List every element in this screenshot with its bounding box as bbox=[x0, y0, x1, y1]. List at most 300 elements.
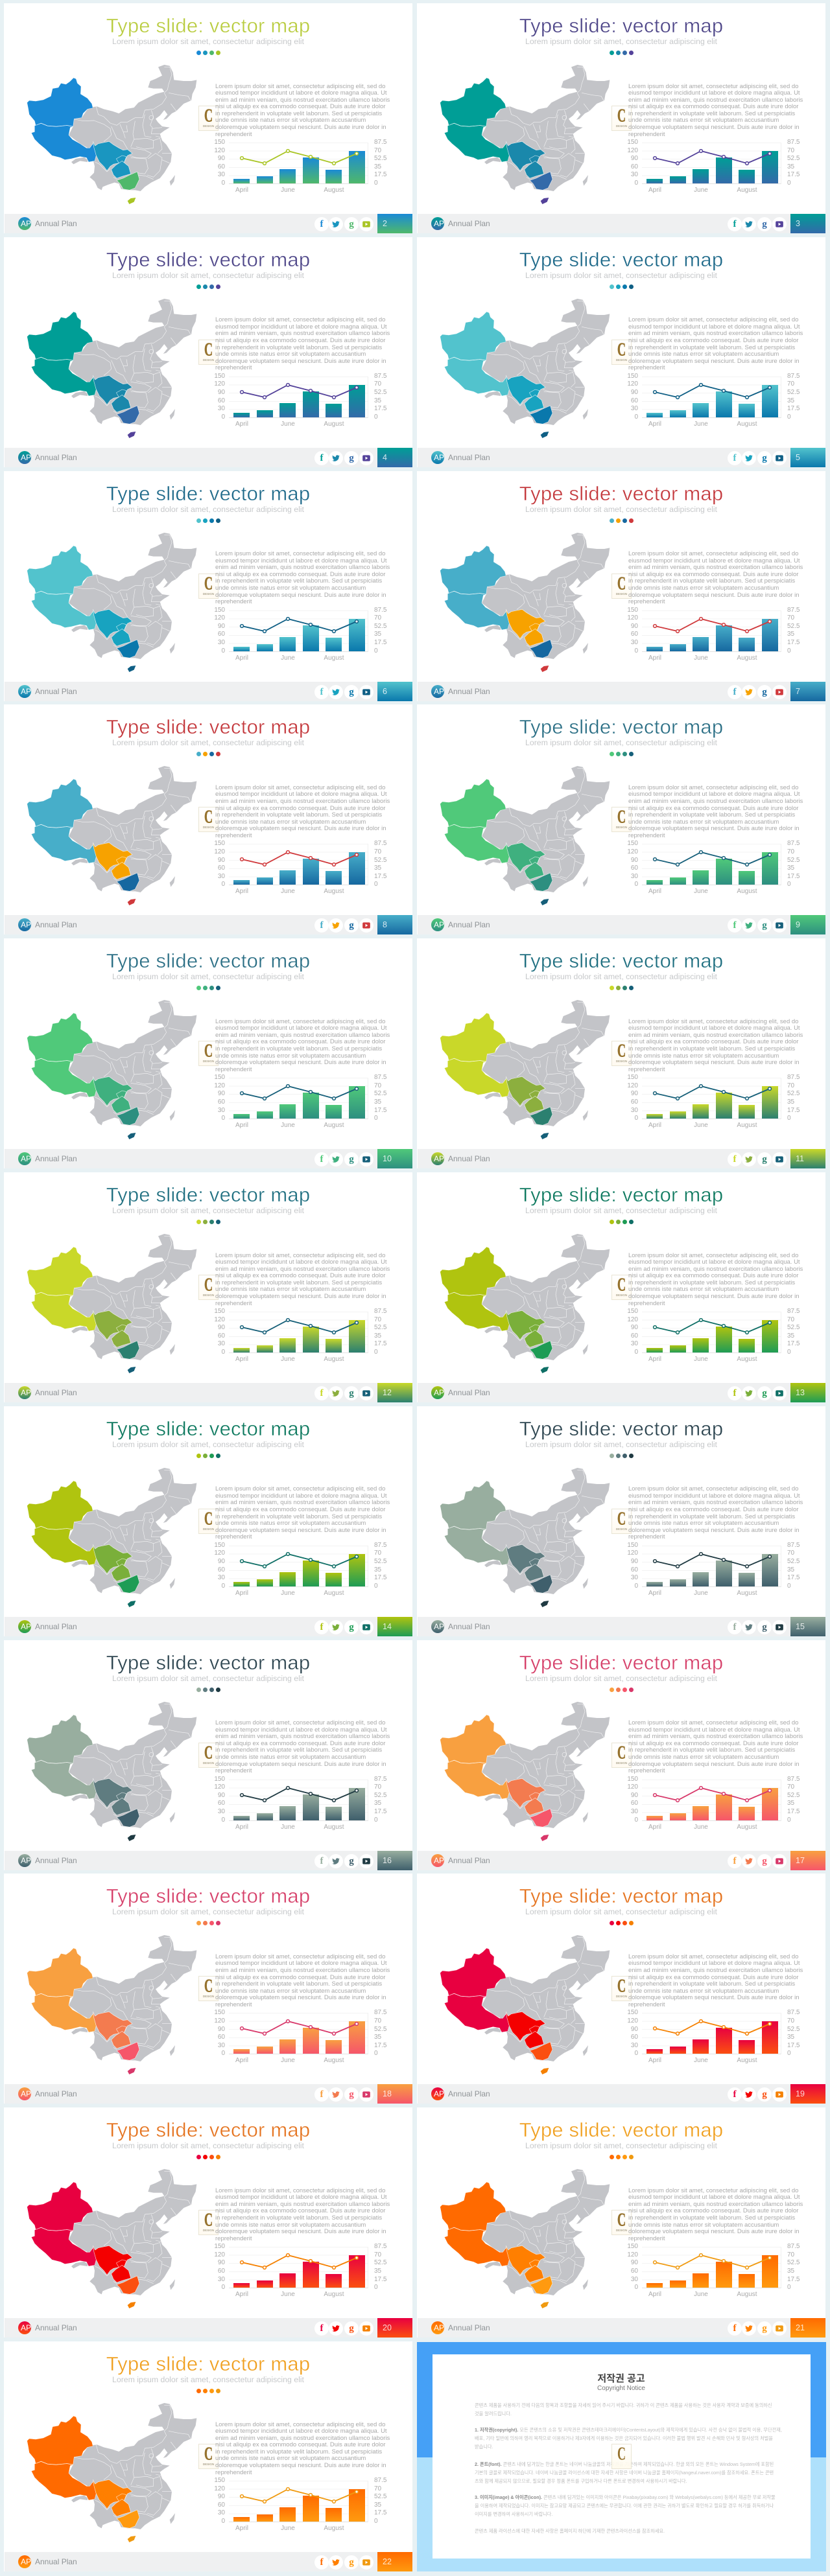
combo chart: August bbox=[324, 1122, 344, 1129]
combo chart bbox=[627, 1776, 802, 1833]
body text bbox=[628, 1252, 803, 1307]
combo chart: 0 bbox=[221, 413, 225, 421]
combo chart: 150 bbox=[214, 1308, 225, 1315]
combo chart: 120 bbox=[627, 614, 638, 621]
body text: eiusmod tempor incididunt ut labore et dolore magna aliqua. Ut bbox=[215, 89, 387, 97]
body text: in reprehenderit in voluptate velit laborum. Sed ut perspiciatis bbox=[215, 811, 382, 818]
combo chart: 120 bbox=[627, 1316, 638, 1323]
body text: Lorem ipsum dolor sit amet, consectetur adipiscing elit, sed do bbox=[215, 784, 385, 791]
map of China bbox=[426, 1922, 627, 2078]
combo chart: 17.5 bbox=[787, 1808, 800, 1815]
footer bbox=[418, 1617, 825, 1636]
body text: eiusmod tempor incididunt ut labore et dolore magna aliqua. Ut bbox=[215, 2194, 387, 2201]
watermark logo: C bbox=[204, 106, 213, 126]
combo chart: 60 bbox=[631, 864, 638, 872]
body text: unde omnis iste natus error sit voluptatem accusantium bbox=[215, 1754, 366, 1761]
combo chart: 60 bbox=[218, 2501, 225, 2509]
body text: doloremque voluptatem sequi nesciunt. Duis aute irure dolor in bbox=[628, 358, 800, 365]
title: Type slide: vector map bbox=[519, 1651, 723, 1674]
body text: eiusmod tempor incididunt ut labore et dolore magna aliqua. Ut bbox=[215, 1025, 387, 1032]
combo chart: 30 bbox=[631, 639, 638, 646]
combo chart bbox=[627, 1074, 802, 1131]
combo chart: 30 bbox=[218, 2042, 225, 2049]
combo chart: 87.5 bbox=[374, 139, 386, 146]
footer: Annual Plan bbox=[35, 1154, 77, 1163]
footer: f bbox=[733, 920, 737, 931]
footer: Annual Plan bbox=[35, 1622, 77, 1631]
body text: nisi ut aliquip ex ea commodo consequat. Duis aute irure dolor bbox=[628, 1974, 798, 1981]
subtitle: Lorem ipsum dolor sit amet, consectetur adipiscing elit bbox=[525, 271, 717, 280]
title: Type slide: vector map bbox=[519, 715, 723, 738]
combo chart: 35 bbox=[374, 163, 381, 170]
combo chart: 150 bbox=[627, 2009, 638, 2016]
combo chart: 90 bbox=[631, 623, 638, 630]
combo chart: 52.5 bbox=[374, 1324, 386, 1331]
slide 6 bbox=[4, 471, 412, 701]
combo chart: 0 bbox=[374, 1349, 378, 1356]
body text: doloremque voluptatem sequi nesciunt. Duis aute irure dolor in bbox=[628, 124, 800, 131]
slide 13 bbox=[413, 1169, 826, 1403]
subtitle: Lorem ipsum dolor sit amet, consectetur adipiscing elit bbox=[525, 1907, 717, 1916]
combo chart: 52.5 bbox=[787, 1792, 800, 1799]
combo chart bbox=[627, 373, 800, 428]
combo chart: April bbox=[648, 2291, 661, 2298]
footer: AP bbox=[21, 1154, 31, 1163]
footer: AP bbox=[434, 1856, 444, 1865]
combo chart: April bbox=[648, 1824, 661, 1831]
combo chart: 35 bbox=[374, 1098, 381, 1106]
footer: 10 bbox=[383, 1154, 392, 1163]
combo chart: 35 bbox=[374, 1332, 381, 1340]
body text: in reprehenderit in voluptate velit laborum. Sed ut perspiciatis bbox=[628, 577, 795, 585]
body text: nisi ut aliquip ex ea commodo consequat. Duis aute irure dolor bbox=[215, 2207, 385, 2214]
combo chart: 70 bbox=[787, 614, 794, 621]
combo chart: 35 bbox=[787, 1098, 794, 1106]
colour dots bbox=[196, 1688, 221, 1692]
map of China bbox=[13, 987, 214, 1143]
body text: reprehenderit bbox=[628, 598, 665, 605]
watermark logo: DESIGN bbox=[203, 1761, 214, 1765]
body text: eiusmod tempor incididunt ut labore et dolore magna aliqua. Ut bbox=[628, 791, 800, 798]
slide 18 bbox=[0, 1870, 413, 2104]
combo chart: 17.5 bbox=[374, 873, 386, 880]
combo chart: April bbox=[235, 2525, 248, 2532]
combo chart: August bbox=[324, 655, 344, 662]
body text: enim ad minim veniam, quis nostrud exercitation ullamco laboris bbox=[215, 564, 390, 571]
body text: reprehenderit bbox=[628, 1533, 665, 1540]
combo chart: June bbox=[281, 421, 295, 428]
watermark logo bbox=[198, 1509, 219, 1534]
footer: g bbox=[762, 687, 767, 697]
body text: eiusmod tempor incididunt ut labore et dolore magna aliqua. Ut bbox=[628, 1492, 800, 1500]
body text: Lorem ipsum dolor sit amet, consectetur adipiscing elit, sed do bbox=[215, 1953, 385, 1960]
watermark logo: C bbox=[617, 807, 626, 828]
combo chart: August bbox=[737, 2291, 757, 2298]
combo chart: 30 bbox=[631, 171, 638, 178]
combo chart: August bbox=[737, 655, 757, 662]
footer bbox=[418, 682, 825, 701]
body text: enim ad minim veniam, quis nostrud exercitation ullamco laboris bbox=[215, 1733, 390, 1740]
watermark logo: DESIGN bbox=[203, 1060, 214, 1063]
body text: doloremque voluptatem sequi nesciunt. Duis aute irure dolor in bbox=[628, 592, 800, 599]
body text: nisi ut aliquip ex ea commodo consequat. Duis aute irure dolor bbox=[628, 805, 798, 812]
watermark logo: C bbox=[204, 1275, 213, 1295]
body text: nisi ut aliquip ex ea commodo consequat. Duis aute irure dolor bbox=[215, 571, 385, 578]
footer: 18 bbox=[383, 2089, 392, 2098]
body text: unde omnis iste natus error sit voluptatem accusantium bbox=[215, 818, 366, 826]
combo chart: 17.5 bbox=[374, 2509, 386, 2516]
combo chart: 87.5 bbox=[787, 607, 800, 614]
subtitle: Lorem ipsum dolor sit amet, consectetur adipiscing elit bbox=[525, 37, 717, 46]
footer: g bbox=[762, 1856, 767, 1866]
body text: reprehenderit bbox=[215, 1767, 252, 1774]
body text: unde omnis iste natus error sit voluptatem accusantium bbox=[628, 585, 779, 592]
combo chart: 30 bbox=[631, 405, 638, 412]
body text bbox=[215, 1486, 390, 1541]
combo chart: August bbox=[737, 1824, 757, 1831]
footer: AP bbox=[21, 219, 31, 228]
footer: AP bbox=[434, 219, 444, 228]
footer bbox=[418, 2084, 825, 2104]
map of China bbox=[13, 1689, 214, 1844]
footer: g bbox=[349, 1856, 354, 1866]
combo chart: June bbox=[281, 888, 295, 895]
body text bbox=[628, 784, 803, 839]
body text: eiusmod tempor incididunt ut labore et dolore magna aliqua. Ut bbox=[628, 89, 800, 97]
combo chart: 120 bbox=[214, 614, 225, 621]
footer: 16 bbox=[383, 1856, 392, 1865]
combo chart: 30 bbox=[218, 1340, 225, 1347]
body text: Lorem ipsum dolor sit amet, consectetur adipiscing elit, sed do bbox=[628, 1018, 798, 1025]
map of China bbox=[440, 766, 610, 905]
combo chart bbox=[627, 1308, 802, 1365]
footer: g bbox=[762, 2323, 767, 2334]
colour dots bbox=[196, 752, 220, 756]
watermark logo bbox=[198, 2444, 219, 2469]
body text: doloremque voluptatem sequi nesciunt. Duis aute irure dolor in bbox=[215, 1761, 386, 1768]
combo chart: 150 bbox=[214, 1776, 225, 1783]
title: Type slide: vector map bbox=[106, 1651, 310, 1674]
footer: AP bbox=[434, 453, 444, 462]
combo chart: 120 bbox=[214, 1783, 225, 1791]
watermark logo: C bbox=[204, 2210, 213, 2231]
map of China bbox=[13, 2390, 214, 2546]
clause 3: 3. 이미지(image) & 아이콘(icon). 콘텐츠 내에 담겨있는 이미지와 아이콘은 Pixabay(pixabay.com) 와 Webalys(webalys.com) 등에서 제공한 무료 저작물 bbox=[475, 2494, 776, 2500]
combo chart: 90 bbox=[631, 389, 638, 396]
slide 16 bbox=[0, 1637, 413, 1871]
body text: eiusmod tempor incididunt ut labore et dolore magna aliqua. Ut bbox=[215, 1259, 387, 1266]
combo chart: 52.5 bbox=[374, 2026, 386, 2033]
map of China bbox=[27, 533, 197, 672]
combo chart: 150 bbox=[214, 2477, 225, 2484]
subtitle: Lorem ipsum dolor sit amet, consectetur adipiscing elit bbox=[112, 972, 304, 981]
combo chart: 60 bbox=[218, 1332, 225, 1340]
body text: enim ad minim veniam, quis nostrud exercitation ullamco laboris bbox=[628, 1499, 803, 1506]
combo chart: April bbox=[235, 2057, 248, 2064]
body text: unde omnis iste natus error sit voluptatem accusantium bbox=[628, 351, 779, 358]
footer: 14 bbox=[383, 1622, 392, 1631]
title: Type slide: vector map bbox=[519, 949, 723, 972]
combo chart: 35 bbox=[787, 397, 794, 404]
body text bbox=[215, 1954, 390, 2009]
footer: Annual Plan bbox=[35, 219, 77, 228]
body text: eiusmod tempor incididunt ut labore et dolore magna aliqua. Ut bbox=[628, 2194, 800, 2201]
body text: nisi ut aliquip ex ea commodo consequat. Duis aute irure dolor bbox=[628, 1038, 798, 1045]
combo chart: 90 bbox=[631, 1324, 638, 1331]
footer: f bbox=[320, 920, 323, 931]
footer: AP bbox=[21, 920, 31, 929]
slide 19 bbox=[413, 1870, 826, 2104]
slide 15 bbox=[413, 1403, 826, 1637]
combo chart: 0 bbox=[374, 1816, 378, 1824]
body text: enim ad minim veniam, quis nostrud exercitation ullamco laboris bbox=[215, 330, 390, 337]
body text: doloremque voluptatem sequi nesciunt. Duis aute irure dolor in bbox=[215, 1994, 386, 2001]
combo chart: 17.5 bbox=[787, 639, 800, 646]
combo chart: 17.5 bbox=[787, 1107, 800, 1114]
combo chart: August bbox=[324, 2057, 344, 2064]
combo chart: 87.5 bbox=[787, 2009, 800, 2016]
combo chart: 0 bbox=[374, 2050, 378, 2057]
body text: unde omnis iste natus error sit voluptatem accusantium bbox=[215, 1052, 366, 1060]
combo chart: 52.5 bbox=[374, 389, 386, 396]
title: Type slide: vector map bbox=[519, 1417, 723, 1440]
footer: AP bbox=[434, 920, 444, 929]
combo chart: 60 bbox=[218, 1566, 225, 1573]
combo chart: 52.5 bbox=[787, 1324, 800, 1331]
body text: in reprehenderit in voluptate velit laborum. Sed ut perspiciatis bbox=[215, 344, 382, 351]
combo chart: 150 bbox=[627, 2243, 638, 2250]
combo chart: 60 bbox=[631, 2268, 638, 2275]
combo chart: 0 bbox=[634, 2050, 638, 2057]
subtitle: Lorem ipsum dolor sit amet, consectetur adipiscing elit bbox=[112, 1907, 304, 1916]
body text: unde omnis iste natus error sit voluptatem accusantium bbox=[628, 818, 779, 826]
watermark logo: DESIGN bbox=[203, 1294, 214, 1297]
watermark logo: DESIGN bbox=[203, 124, 214, 128]
combo chart: 17.5 bbox=[374, 639, 386, 646]
combo chart: 52.5 bbox=[787, 1090, 800, 1097]
colour dots bbox=[196, 1220, 221, 1224]
watermark logo bbox=[198, 807, 219, 832]
clause 2: 츠와 함께 제공되지 않으므로, 필요할 경우 정품 폰트를 구입하거나 다른 폰트로 변경하여 사용하시기 바랍니다. bbox=[475, 2478, 687, 2484]
combo chart: 120 bbox=[214, 147, 225, 154]
footer: Annual Plan bbox=[35, 920, 77, 929]
combo chart: April bbox=[648, 187, 661, 194]
footer: f bbox=[320, 687, 323, 697]
combo chart: 0 bbox=[787, 1349, 791, 1356]
footer bbox=[418, 448, 825, 467]
combo chart: 70 bbox=[787, 1316, 794, 1323]
body text: reprehenderit bbox=[215, 832, 252, 839]
footer: f bbox=[320, 2089, 323, 2100]
body text: nisi ut aliquip ex ea commodo consequat. Duis aute irure dolor bbox=[215, 103, 385, 110]
combo chart: 87.5 bbox=[787, 1074, 800, 1081]
body text: enim ad minim veniam, quis nostrud exercitation ullamco laboris bbox=[215, 2435, 390, 2442]
combo chart: 90 bbox=[218, 1324, 225, 1331]
body text bbox=[628, 2188, 803, 2242]
body text: reprehenderit bbox=[215, 1300, 252, 1307]
combo chart: April bbox=[648, 2057, 661, 2064]
body text: in reprehenderit in voluptate velit laborum. Sed ut perspiciatis bbox=[215, 1279, 382, 1286]
combo chart: 0 bbox=[634, 413, 638, 421]
body text: reprehenderit bbox=[215, 131, 252, 138]
colour dots bbox=[196, 2389, 221, 2393]
combo chart: June bbox=[281, 1122, 295, 1129]
subtitle: Lorem ipsum dolor sit amet, consectetur adipiscing elit bbox=[525, 972, 717, 981]
footer: g bbox=[349, 2089, 354, 2100]
body text: in reprehenderit in voluptate velit laborum. Sed ut perspiciatis bbox=[215, 110, 382, 117]
title: Type slide: vector map bbox=[106, 482, 310, 505]
watermark logo: C bbox=[204, 807, 213, 828]
combo chart: 70 bbox=[374, 1082, 381, 1089]
slide 3 bbox=[417, 3, 825, 233]
slide 12 bbox=[0, 1169, 413, 1403]
body text: nisi ut aliquip ex ea commodo consequat. Duis aute irure dolor bbox=[215, 337, 385, 344]
map of China bbox=[27, 299, 197, 438]
footer: f bbox=[733, 1622, 737, 1632]
body text: Lorem ipsum dolor sit amet, consectetur adipiscing elit, sed do bbox=[215, 1018, 385, 1025]
combo chart: 0 bbox=[634, 2284, 638, 2291]
title: Type slide: vector map bbox=[106, 949, 310, 972]
subtitle: Lorem ipsum dolor sit amet, consectetur adipiscing elit bbox=[112, 37, 304, 46]
watermark logo: DESIGN bbox=[203, 1527, 214, 1531]
combo chart: August bbox=[737, 2057, 757, 2064]
combo chart bbox=[214, 2243, 389, 2300]
combo chart: 35 bbox=[787, 2268, 794, 2275]
footer: Annual Plan bbox=[35, 1856, 77, 1865]
body text: reprehenderit bbox=[628, 131, 665, 138]
body text: doloremque voluptatem sequi nesciunt. Duis aute irure dolor in bbox=[628, 1527, 800, 1534]
body text: Lorem ipsum dolor sit amet, consectetur adipiscing elit, sed do bbox=[215, 83, 385, 89]
body text: reprehenderit bbox=[215, 598, 252, 605]
intro text: 콘텐츠 제품을 사용하기 전에 다음의 항목과 조항들을 자세히 읽어 주시기 바랍니다. 귀하가 이 콘텐츠 제품을 사용하는 것은 사용자 계약과 보증에 동의하신 bbox=[475, 2402, 772, 2408]
combo chart: 70 bbox=[374, 2251, 381, 2258]
combo chart: 150 bbox=[627, 1074, 638, 1081]
body text: nisi ut aliquip ex ea commodo consequat. Duis aute irure dolor bbox=[215, 1974, 385, 1981]
combo chart: August bbox=[324, 1590, 344, 1597]
body text: unde omnis iste natus error sit voluptatem accusantium bbox=[628, 1754, 779, 1761]
body text: Lorem ipsum dolor sit amet, consectetur adipiscing elit, sed do bbox=[628, 316, 798, 323]
combo chart: 52.5 bbox=[374, 1792, 386, 1799]
combo chart: 52.5 bbox=[787, 857, 800, 864]
watermark logo bbox=[611, 2444, 632, 2469]
body text bbox=[215, 2188, 390, 2242]
combo chart: June bbox=[281, 2525, 295, 2532]
body text: enim ad minim veniam, quis nostrud exercitation ullamco laboris bbox=[628, 798, 803, 805]
body text: Lorem ipsum dolor sit amet, consectetur adipiscing elit, sed do bbox=[628, 1953, 798, 1960]
combo chart: 70 bbox=[787, 1082, 794, 1089]
footer: AP bbox=[21, 1622, 31, 1631]
title: Type slide: vector map bbox=[106, 248, 310, 271]
title: Type slide: vector map bbox=[106, 715, 310, 738]
title: Type slide: vector map bbox=[106, 1885, 310, 1907]
combo chart: 87.5 bbox=[787, 840, 800, 847]
combo chart: 70 bbox=[374, 614, 381, 621]
watermark logo: C bbox=[204, 1509, 213, 1529]
map of China bbox=[440, 65, 610, 204]
footer: 9 bbox=[796, 920, 800, 929]
slide 22 bbox=[0, 2338, 413, 2572]
combo chart: June bbox=[694, 421, 708, 428]
body text: reprehenderit bbox=[628, 364, 665, 371]
combo chart bbox=[214, 373, 386, 428]
footer: 8 bbox=[383, 920, 387, 929]
watermark logo: C bbox=[617, 1977, 626, 1997]
footer: 17 bbox=[796, 1856, 805, 1865]
combo chart: 35 bbox=[787, 864, 794, 872]
combo chart: 0 bbox=[634, 881, 638, 888]
combo chart bbox=[627, 840, 800, 895]
body text: doloremque voluptatem sequi nesciunt. Duis aute irure dolor in bbox=[215, 825, 386, 832]
map of China bbox=[13, 1922, 214, 2078]
body text: nisi ut aliquip ex ea commodo consequat. Duis aute irure dolor bbox=[215, 805, 385, 812]
combo chart: 52.5 bbox=[787, 2026, 800, 2033]
body text: doloremque voluptatem sequi nesciunt. Duis aute irure dolor in bbox=[628, 2228, 800, 2235]
combo chart: 52.5 bbox=[374, 623, 386, 630]
combo chart: 17.5 bbox=[374, 1808, 386, 1815]
combo chart: 70 bbox=[374, 1783, 381, 1791]
combo chart: 0 bbox=[374, 647, 378, 655]
colour dots bbox=[196, 2155, 221, 2159]
footer: f bbox=[320, 219, 323, 229]
title: Type slide: vector map bbox=[519, 2118, 723, 2141]
body text: unde omnis iste natus error sit voluptatem accusantium bbox=[628, 1286, 779, 1293]
footer: g bbox=[762, 2089, 767, 2100]
combo chart: June bbox=[694, 1824, 708, 1831]
body text: in reprehenderit in voluptate velit laborum. Sed ut perspiciatis bbox=[215, 1045, 382, 1052]
footer: g bbox=[762, 219, 767, 229]
footer: AP bbox=[21, 1388, 31, 1397]
body text: in reprehenderit in voluptate velit laborum. Sed ut perspiciatis bbox=[215, 1513, 382, 1520]
watermark logo: DESIGN bbox=[203, 592, 214, 596]
combo chart: 87.5 bbox=[787, 2243, 800, 2250]
title: Type slide: vector map bbox=[106, 2118, 310, 2141]
body text: unde omnis iste natus error sit voluptatem accusantium bbox=[628, 1052, 779, 1060]
subtitle: Lorem ipsum dolor sit amet, consectetur adipiscing elit bbox=[525, 505, 717, 514]
intro text bbox=[475, 2401, 768, 2418]
footer: g bbox=[349, 453, 354, 463]
clause 1 bbox=[475, 2426, 768, 2451]
combo chart: August bbox=[737, 1590, 757, 1597]
body text: nisi ut aliquip ex ea commodo consequat. Duis aute irure dolor bbox=[215, 1740, 385, 1747]
combo chart: 150 bbox=[627, 840, 638, 847]
footer bbox=[5, 682, 412, 701]
title: Type slide: vector map bbox=[106, 1417, 310, 1440]
body text: in reprehenderit in voluptate velit laborum. Sed ut perspiciatis bbox=[215, 577, 382, 585]
combo chart bbox=[214, 840, 386, 895]
watermark logo: DESIGN bbox=[203, 2229, 214, 2232]
combo chart bbox=[214, 2477, 389, 2534]
combo chart: 0 bbox=[221, 2518, 225, 2525]
combo chart bbox=[627, 2009, 802, 2066]
combo chart: 35 bbox=[787, 163, 794, 170]
footer: 20 bbox=[383, 2323, 392, 2332]
combo chart: 0 bbox=[787, 1816, 791, 1824]
watermark logo: DESIGN bbox=[616, 1527, 627, 1531]
combo chart: 35 bbox=[787, 1566, 794, 1573]
body text: Lorem ipsum dolor sit amet, consectetur adipiscing elit, sed do bbox=[628, 1719, 798, 1726]
footer: f bbox=[733, 2323, 737, 2334]
body text: reprehenderit bbox=[628, 1300, 665, 1307]
combo chart: 90 bbox=[631, 2026, 638, 2033]
subtitle: Lorem ipsum dolor sit amet, consectetur adipiscing elit bbox=[525, 1440, 717, 1449]
combo chart: 87.5 bbox=[787, 1776, 800, 1783]
combo chart: 60 bbox=[218, 1098, 225, 1106]
footer: Annual Plan bbox=[35, 2089, 77, 2098]
combo chart: 120 bbox=[627, 1783, 638, 1791]
body text: doloremque voluptatem sequi nesciunt. Duis aute irure dolor in bbox=[628, 825, 800, 832]
footer: g bbox=[349, 920, 354, 931]
combo chart: 52.5 bbox=[787, 155, 800, 162]
